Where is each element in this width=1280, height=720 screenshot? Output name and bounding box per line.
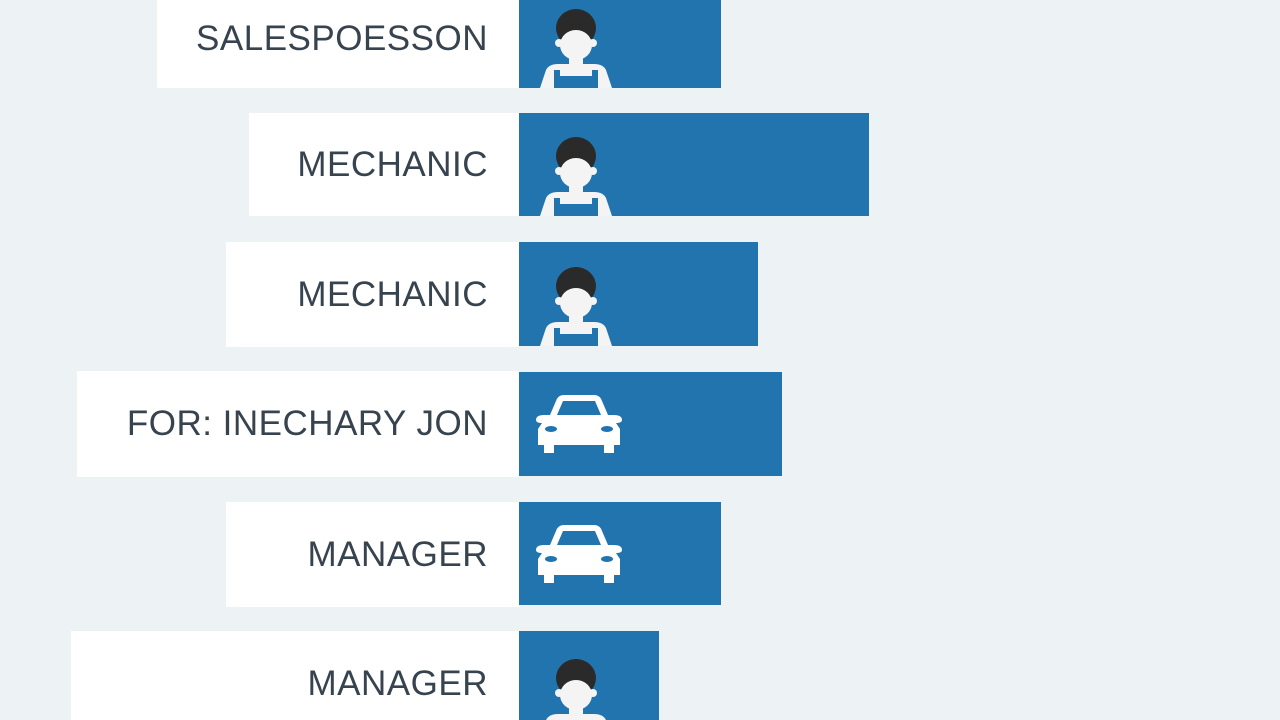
icon: person	[540, 267, 612, 346]
row 6 label	[71, 631, 519, 720]
row 5 bar	[519, 502, 721, 605]
row 6 label: MANAGER	[308, 664, 488, 702]
icon: person	[546, 659, 606, 720]
icon: car	[536, 525, 622, 583]
row 5 label: MANAGER	[308, 534, 488, 574]
icon: person	[540, 9, 612, 88]
row 4 label	[77, 371, 519, 477]
row 5 label	[226, 502, 519, 607]
row 4 bar	[519, 372, 782, 476]
row 2 label: MECHANIC	[297, 144, 488, 184]
row 6 bar	[519, 631, 659, 720]
row 2 bar	[519, 113, 869, 216]
row 3 label	[226, 242, 519, 347]
row 2 label	[249, 113, 519, 216]
row 1 label: SALESPOESSON	[196, 19, 488, 58]
icon: car	[536, 395, 622, 453]
row 4 label: FOR: INECHARY JON	[127, 404, 488, 443]
row 3 label: MECHANIC	[297, 274, 488, 314]
icon: person	[540, 137, 612, 216]
row 1 bar	[519, 0, 721, 88]
row 1 label	[157, 0, 519, 88]
row 3 bar	[519, 242, 758, 346]
